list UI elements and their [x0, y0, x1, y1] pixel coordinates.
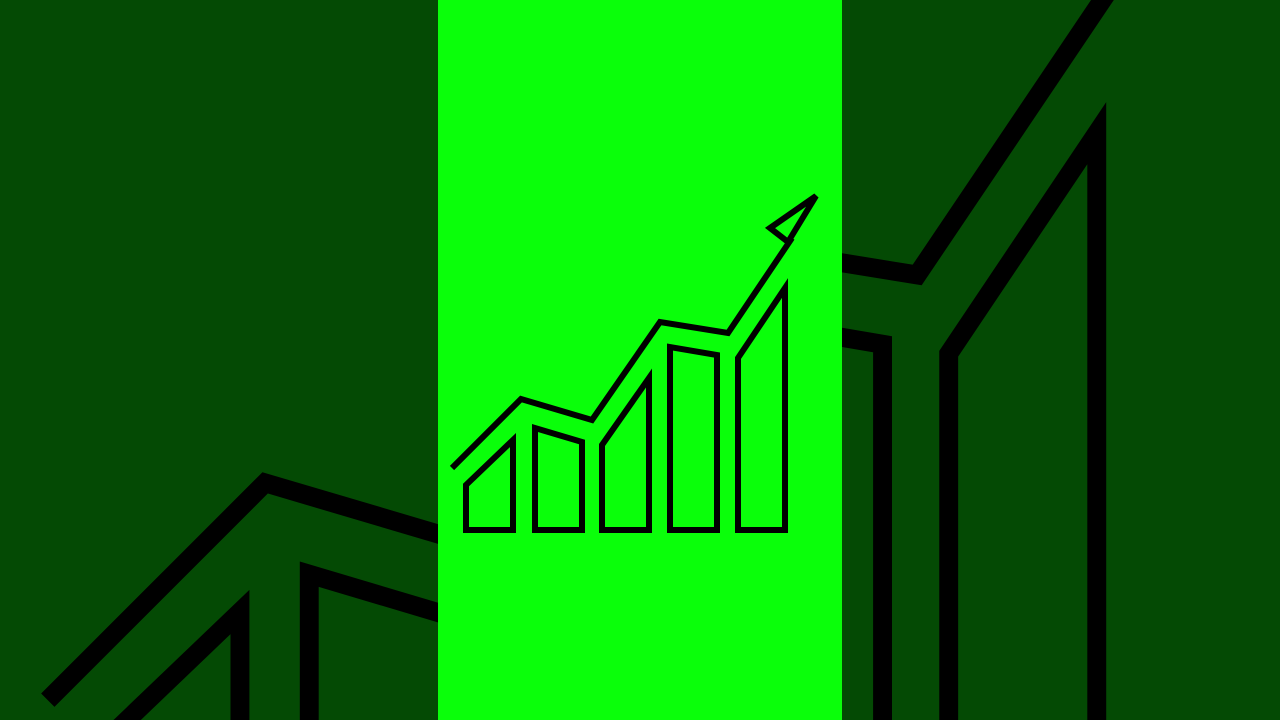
icon: rising bar chart with arrow [452, 196, 816, 530]
panel: center green [438, 0, 842, 720]
